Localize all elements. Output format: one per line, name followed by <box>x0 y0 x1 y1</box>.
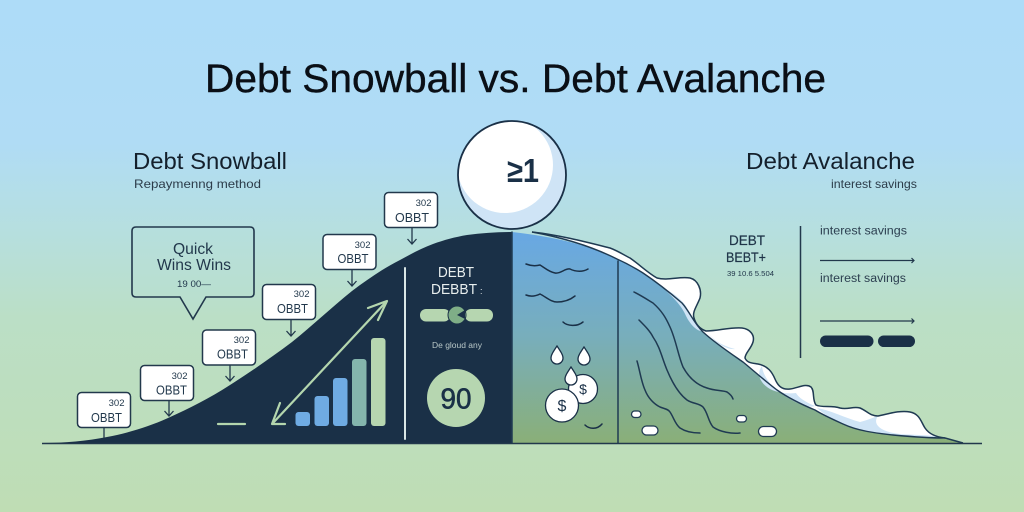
callout: quick wins: Wins Wins <box>157 257 231 274</box>
avalanche flow lines <box>634 292 740 433</box>
callout: quick wins <box>132 227 254 319</box>
heading: debt snowball: Debt Snowball <box>133 148 287 174</box>
water drops and coins <box>546 346 598 422</box>
ripple lines <box>526 264 602 428</box>
arrow 1 <box>820 258 914 263</box>
colon mark: : <box>480 286 483 296</box>
debt tag 3 <box>202 330 256 381</box>
baseline <box>42 442 982 444</box>
avalanche debt label: BEBT+ <box>726 249 766 265</box>
debt tag 2 <box>140 366 194 416</box>
avalanche debt label: 39 10.6 5.504 <box>727 271 774 278</box>
heading: debt avalanche: Debt Avalanche <box>746 148 915 174</box>
debt tag 5: OBBT <box>338 251 369 266</box>
debt tag 6 <box>384 192 438 244</box>
panel dividers <box>405 232 618 443</box>
debt tag 1 <box>78 392 130 438</box>
hill: avalanche side <box>512 232 963 443</box>
debt tag 4: OBBT <box>277 301 308 316</box>
pill bar right <box>878 336 915 347</box>
number badge <box>427 369 485 427</box>
number badge: 90 <box>440 384 472 416</box>
heading: debt snowball <box>133 148 287 191</box>
debt tag 1: OBBT <box>91 410 122 425</box>
debt tag 2: 302 <box>172 371 188 382</box>
debt tag 6: 302 <box>416 198 432 209</box>
subheading: interest savings: interest savings <box>831 177 917 191</box>
debt tag 5: 302 <box>355 240 370 251</box>
subheading: repayment method: Repaymenng method <box>134 177 261 191</box>
debt tag 6: OBBT <box>395 210 429 225</box>
panel: debt label: De gloud any <box>432 341 482 350</box>
debt tag 1: 302 <box>109 398 124 409</box>
vertical divider <box>800 226 802 358</box>
avalanche debt label: DEBT <box>729 232 765 248</box>
title: Debt Snowball vs. Debt Avalanche <box>205 57 826 101</box>
pill bar left <box>820 336 874 347</box>
debt tag 3: OBBT <box>217 346 248 362</box>
interest savings list: interest savings <box>820 273 906 285</box>
debt tag 4: 302 <box>294 289 310 300</box>
snowball circle <box>457 117 566 229</box>
avalanche debt label <box>726 232 774 278</box>
snowball circle: ≥1 <box>507 152 539 189</box>
callout: quick wins: Quick <box>173 241 213 258</box>
interest savings list <box>820 226 915 347</box>
rubble stones <box>632 411 776 436</box>
callout: quick wins: 19 00— <box>177 279 212 290</box>
pill toggle icon <box>420 306 493 324</box>
coin back: $ <box>579 381 587 397</box>
snow crest <box>532 232 963 443</box>
debt tag 2: OBBT <box>156 382 187 398</box>
panel: debt label: DEBBT <box>431 282 477 298</box>
debt tag 5 <box>323 234 376 286</box>
panel: debt label <box>420 265 493 427</box>
debt tag 4 <box>262 284 316 336</box>
growth arrow <box>218 301 387 424</box>
bar chart <box>296 338 386 426</box>
panel: debt label: DEBT <box>438 265 474 281</box>
arrow 2 <box>820 318 914 324</box>
debt tag 3: 302 <box>234 335 250 346</box>
interest savings list: interest savings <box>820 226 907 238</box>
coin front: $ <box>558 398 567 415</box>
hill: snowball side <box>42 232 512 443</box>
heading: debt avalanche <box>746 148 917 191</box>
